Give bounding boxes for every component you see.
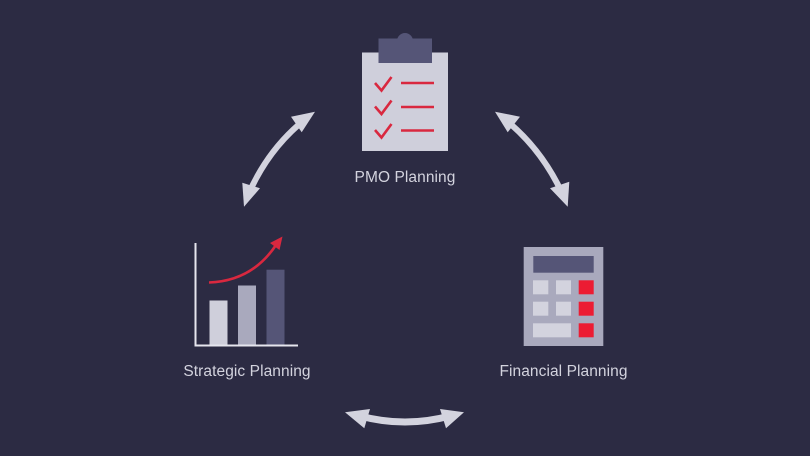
icon: clipboard checklist [362, 33, 448, 151]
arrow: PMO to Financial [495, 112, 569, 207]
label: Financial Planning: Financial Planning [499, 363, 628, 380]
icon: calculator [524, 247, 603, 346]
arrow: PMO to Strategic [242, 112, 315, 207]
arrow: Strategic to Financial [345, 409, 464, 428]
icon: bar chart with rising arrow [196, 236, 298, 346]
label: PMO Planning: PMO Planning [355, 169, 455, 186]
label: Strategic Planning: Strategic Planning [183, 363, 311, 380]
